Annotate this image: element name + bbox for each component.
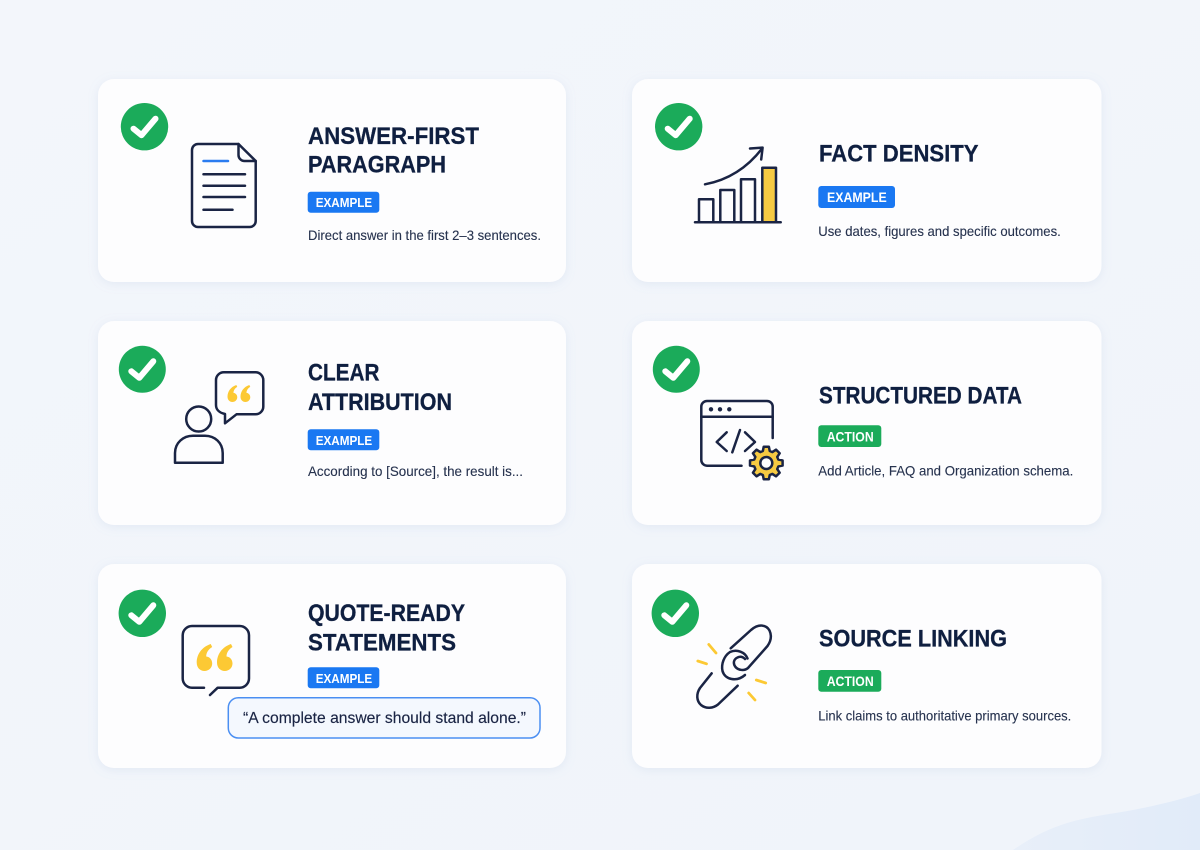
icon: code window with gear [701, 401, 783, 479]
heading: ATTRIBUTION [308, 389, 452, 416]
heading [308, 360, 452, 416]
heading [308, 600, 465, 656]
heading: STRUCTURED DATA [819, 382, 1022, 409]
tag: example [308, 192, 379, 213]
tag: example [308, 667, 379, 688]
icon: green check badge [652, 590, 699, 637]
callout: quote [228, 698, 540, 738]
tag: action [818, 425, 881, 447]
description: According to [Source], the result is... [308, 463, 523, 479]
heading [308, 123, 479, 179]
icon: green check badge [121, 103, 168, 150]
tag: example [308, 429, 379, 450]
icon: green check badge [653, 346, 700, 393]
icon: green check badge [655, 103, 702, 150]
heading: CLEAR [308, 360, 380, 387]
heading: SOURCE LINKING [819, 626, 1007, 653]
tag: example: EXAMPLE [827, 189, 887, 205]
icon: green check badge [119, 590, 166, 637]
panel: answer-first paragraph [98, 79, 566, 282]
heading: PARAGRAPH [308, 152, 446, 179]
heading: FACT DENSITY [819, 141, 978, 168]
description: Link claims to authoritative primary sources. [818, 708, 1071, 724]
icon: chain link with sparks [697, 626, 771, 708]
icon: document [192, 144, 256, 227]
tag: action: ACTION [827, 428, 874, 444]
panel: source linking [632, 564, 1102, 768]
icon: rising bar chart [695, 148, 781, 222]
panel: fact density [632, 79, 1102, 282]
tag: example: EXAMPLE [316, 671, 372, 686]
tag: example [818, 186, 895, 208]
tag: action [818, 670, 881, 692]
icon: green check badge [119, 346, 166, 393]
tag: example: EXAMPLE [316, 433, 372, 448]
icon: quote speech bubble [183, 626, 249, 695]
panel: quote-ready statements [98, 564, 566, 768]
description: Use dates, figures and specific outcomes. [818, 223, 1061, 239]
panel: clear attribution [98, 321, 566, 525]
tag: example: EXAMPLE [316, 195, 372, 210]
description: Direct answer in the first 2–3 sentences. [308, 227, 541, 243]
icon: person with quote bubble [175, 372, 263, 463]
heading: ANSWER-FIRST [308, 123, 479, 150]
callout: quote: “A complete answer should stand alone.” [243, 710, 526, 727]
panel: structured data [632, 321, 1102, 525]
heading: QUOTE-READY [308, 600, 465, 627]
heading: STATEMENTS [308, 629, 456, 656]
description: Add Article, FAQ and Organization schema. [818, 462, 1073, 478]
tag: action: ACTION [827, 673, 874, 689]
